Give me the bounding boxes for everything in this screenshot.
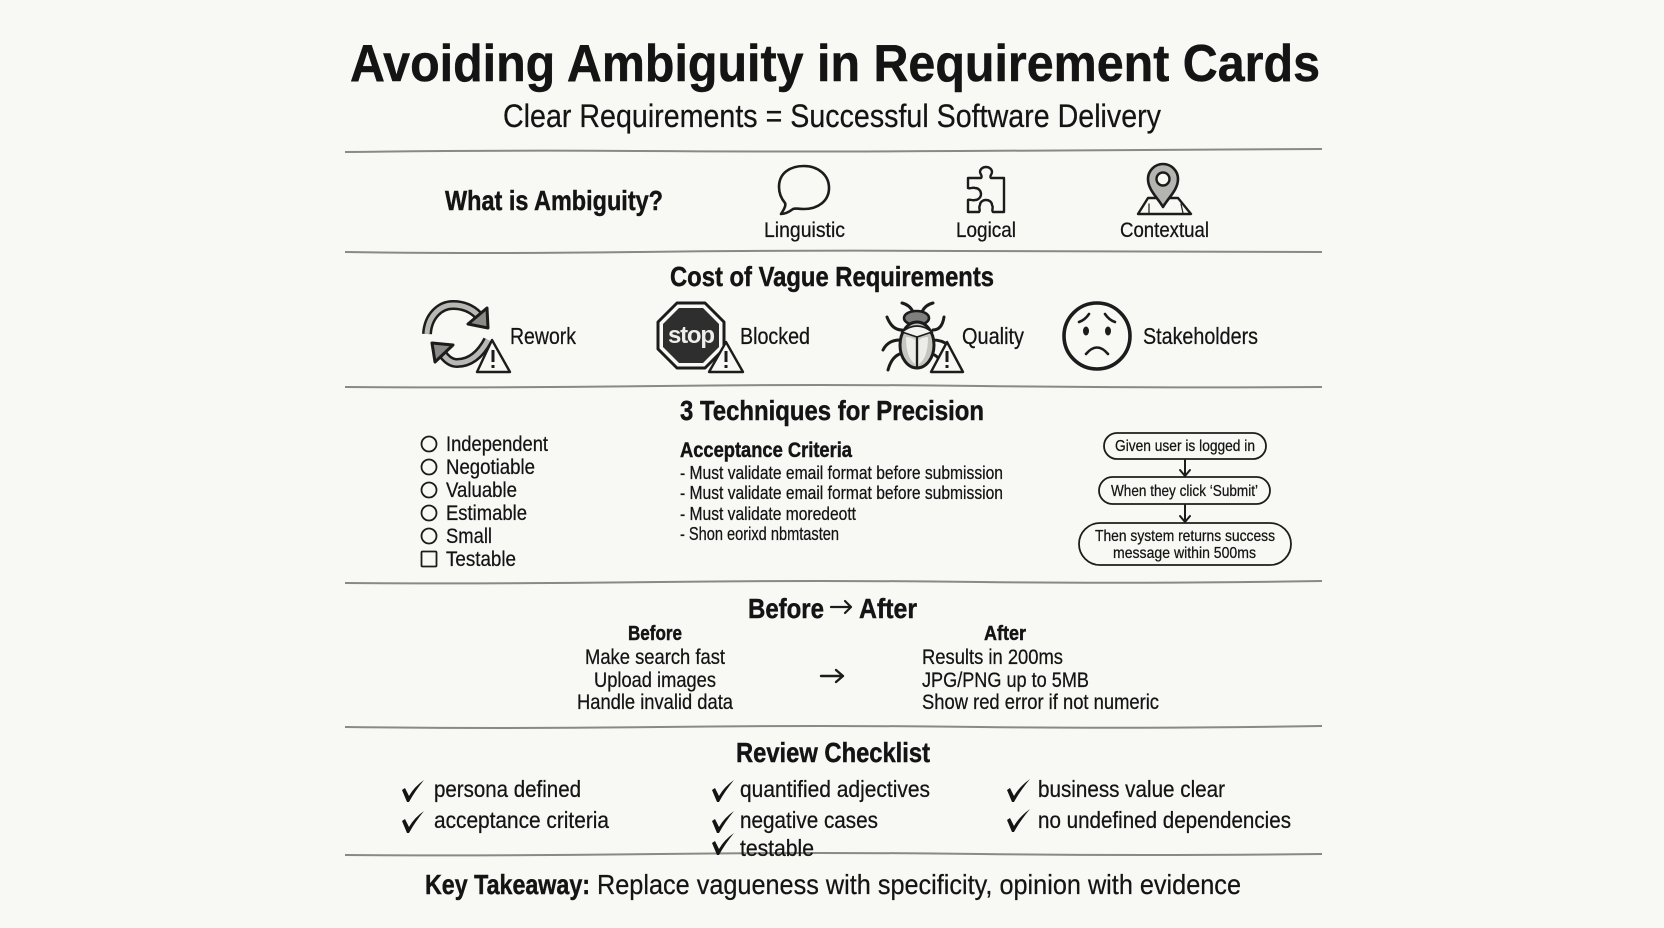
INVEST checklist: Testable [446,548,516,571]
checklist column 1: acceptance criteria [434,807,609,833]
given when then flow [1079,433,1291,565]
given when then flow: Then system returns success [1095,528,1275,545]
checklist column 2 [712,776,930,861]
acceptance criteria: - Must validate email format before submission [680,463,1003,483]
panel: what is ambiguity [445,164,1209,242]
after column: JPG/PNG up to 5MB [922,669,1089,692]
panel: review checklist [402,737,1291,861]
before column: Make search fast [585,646,725,669]
before column: Handle invalid data [577,691,733,714]
icon: stop sign with warning: stop [668,322,715,349]
label: linguistic: Linguistic [764,219,845,242]
icon: sad face [1064,303,1130,369]
title: Avoiding Ambiguity in Requirement Cards [350,35,1320,93]
heading: before to after: After [859,593,917,624]
after column [922,623,1159,714]
after column: Results in 200ms [922,646,1063,669]
icon: map pin [1138,164,1191,214]
after column: After [984,623,1026,645]
label: blocked: Blocked [740,323,810,349]
INVEST checklist [422,433,548,571]
icon: puzzle piece [968,167,1004,212]
given when then flow: When they click ‘Submit’ [1111,483,1258,500]
panel: cost of vague requirements [427,261,1258,372]
INVEST checklist: Independent [446,433,548,456]
checklist column 2: negative cases [740,807,878,833]
before column [577,623,733,714]
checklist column 3: business value clear [1038,776,1225,802]
INVEST checklist: Negotiable [446,456,535,479]
acceptance criteria: - Shon eorixd nbmtasten [680,524,839,544]
INVEST checklist: Small [446,525,492,548]
after column: Show red error if not numeric [922,691,1159,714]
checklist column 3 [1007,776,1291,833]
checklist column 3: no undefined dependencies [1038,807,1291,833]
given when then flow: message within 500ms [1113,545,1256,562]
key takeaway: Replace vagueness with specificity, opinion with evidence [597,869,1241,900]
label: quality: Quality [962,323,1024,349]
acceptance criteria: - Must validate moredeott [680,504,856,524]
acceptance criteria: - Must validate email format before submission [680,483,1003,503]
INVEST checklist: Valuable [446,479,517,502]
label: stakeholders: Stakeholders [1143,323,1258,349]
icon: speech bubble [779,166,829,214]
label: rework: Rework [510,323,576,349]
INVEST checklist: Estimable [446,502,527,525]
label: logical: Logical [956,219,1016,242]
before column: Before [628,623,682,645]
acceptance criteria: Acceptance Criteria [680,439,852,462]
panel: 3 techniques for precision [422,395,1291,571]
checklist column 1: persona defined [434,776,581,802]
heading: review checklist: Review Checklist [736,737,930,768]
arrow: before to after [821,670,843,682]
icon: stop sign with warning [658,303,743,372]
acceptance criteria [680,439,1003,544]
panel: before and after [577,593,1159,714]
heading: before to after [748,593,917,624]
checklist column 2: quantified adjectives [740,776,930,802]
before column: Upload images [594,669,716,692]
heading: cost of vague requirements: Cost of Vague Requirements [670,261,994,292]
icon: rework arrows with warning [427,305,510,372]
checklist column 1 [402,776,609,833]
label: contextual: Contextual [1120,219,1209,242]
key takeaway: Key Takeaway: [425,869,590,900]
given when then flow: Given user is logged in [1115,438,1255,455]
subtitle: Clear Requirements = Successful Software Delivery [503,98,1161,134]
checklist column 2: testable [740,835,814,861]
heading: 3 techniques: 3 Techniques for Precision [680,395,984,426]
heading: before to after: Before [748,593,824,624]
heading: what is ambiguity: What is Ambiguity? [445,185,663,216]
icon: bug with warning [883,303,963,372]
